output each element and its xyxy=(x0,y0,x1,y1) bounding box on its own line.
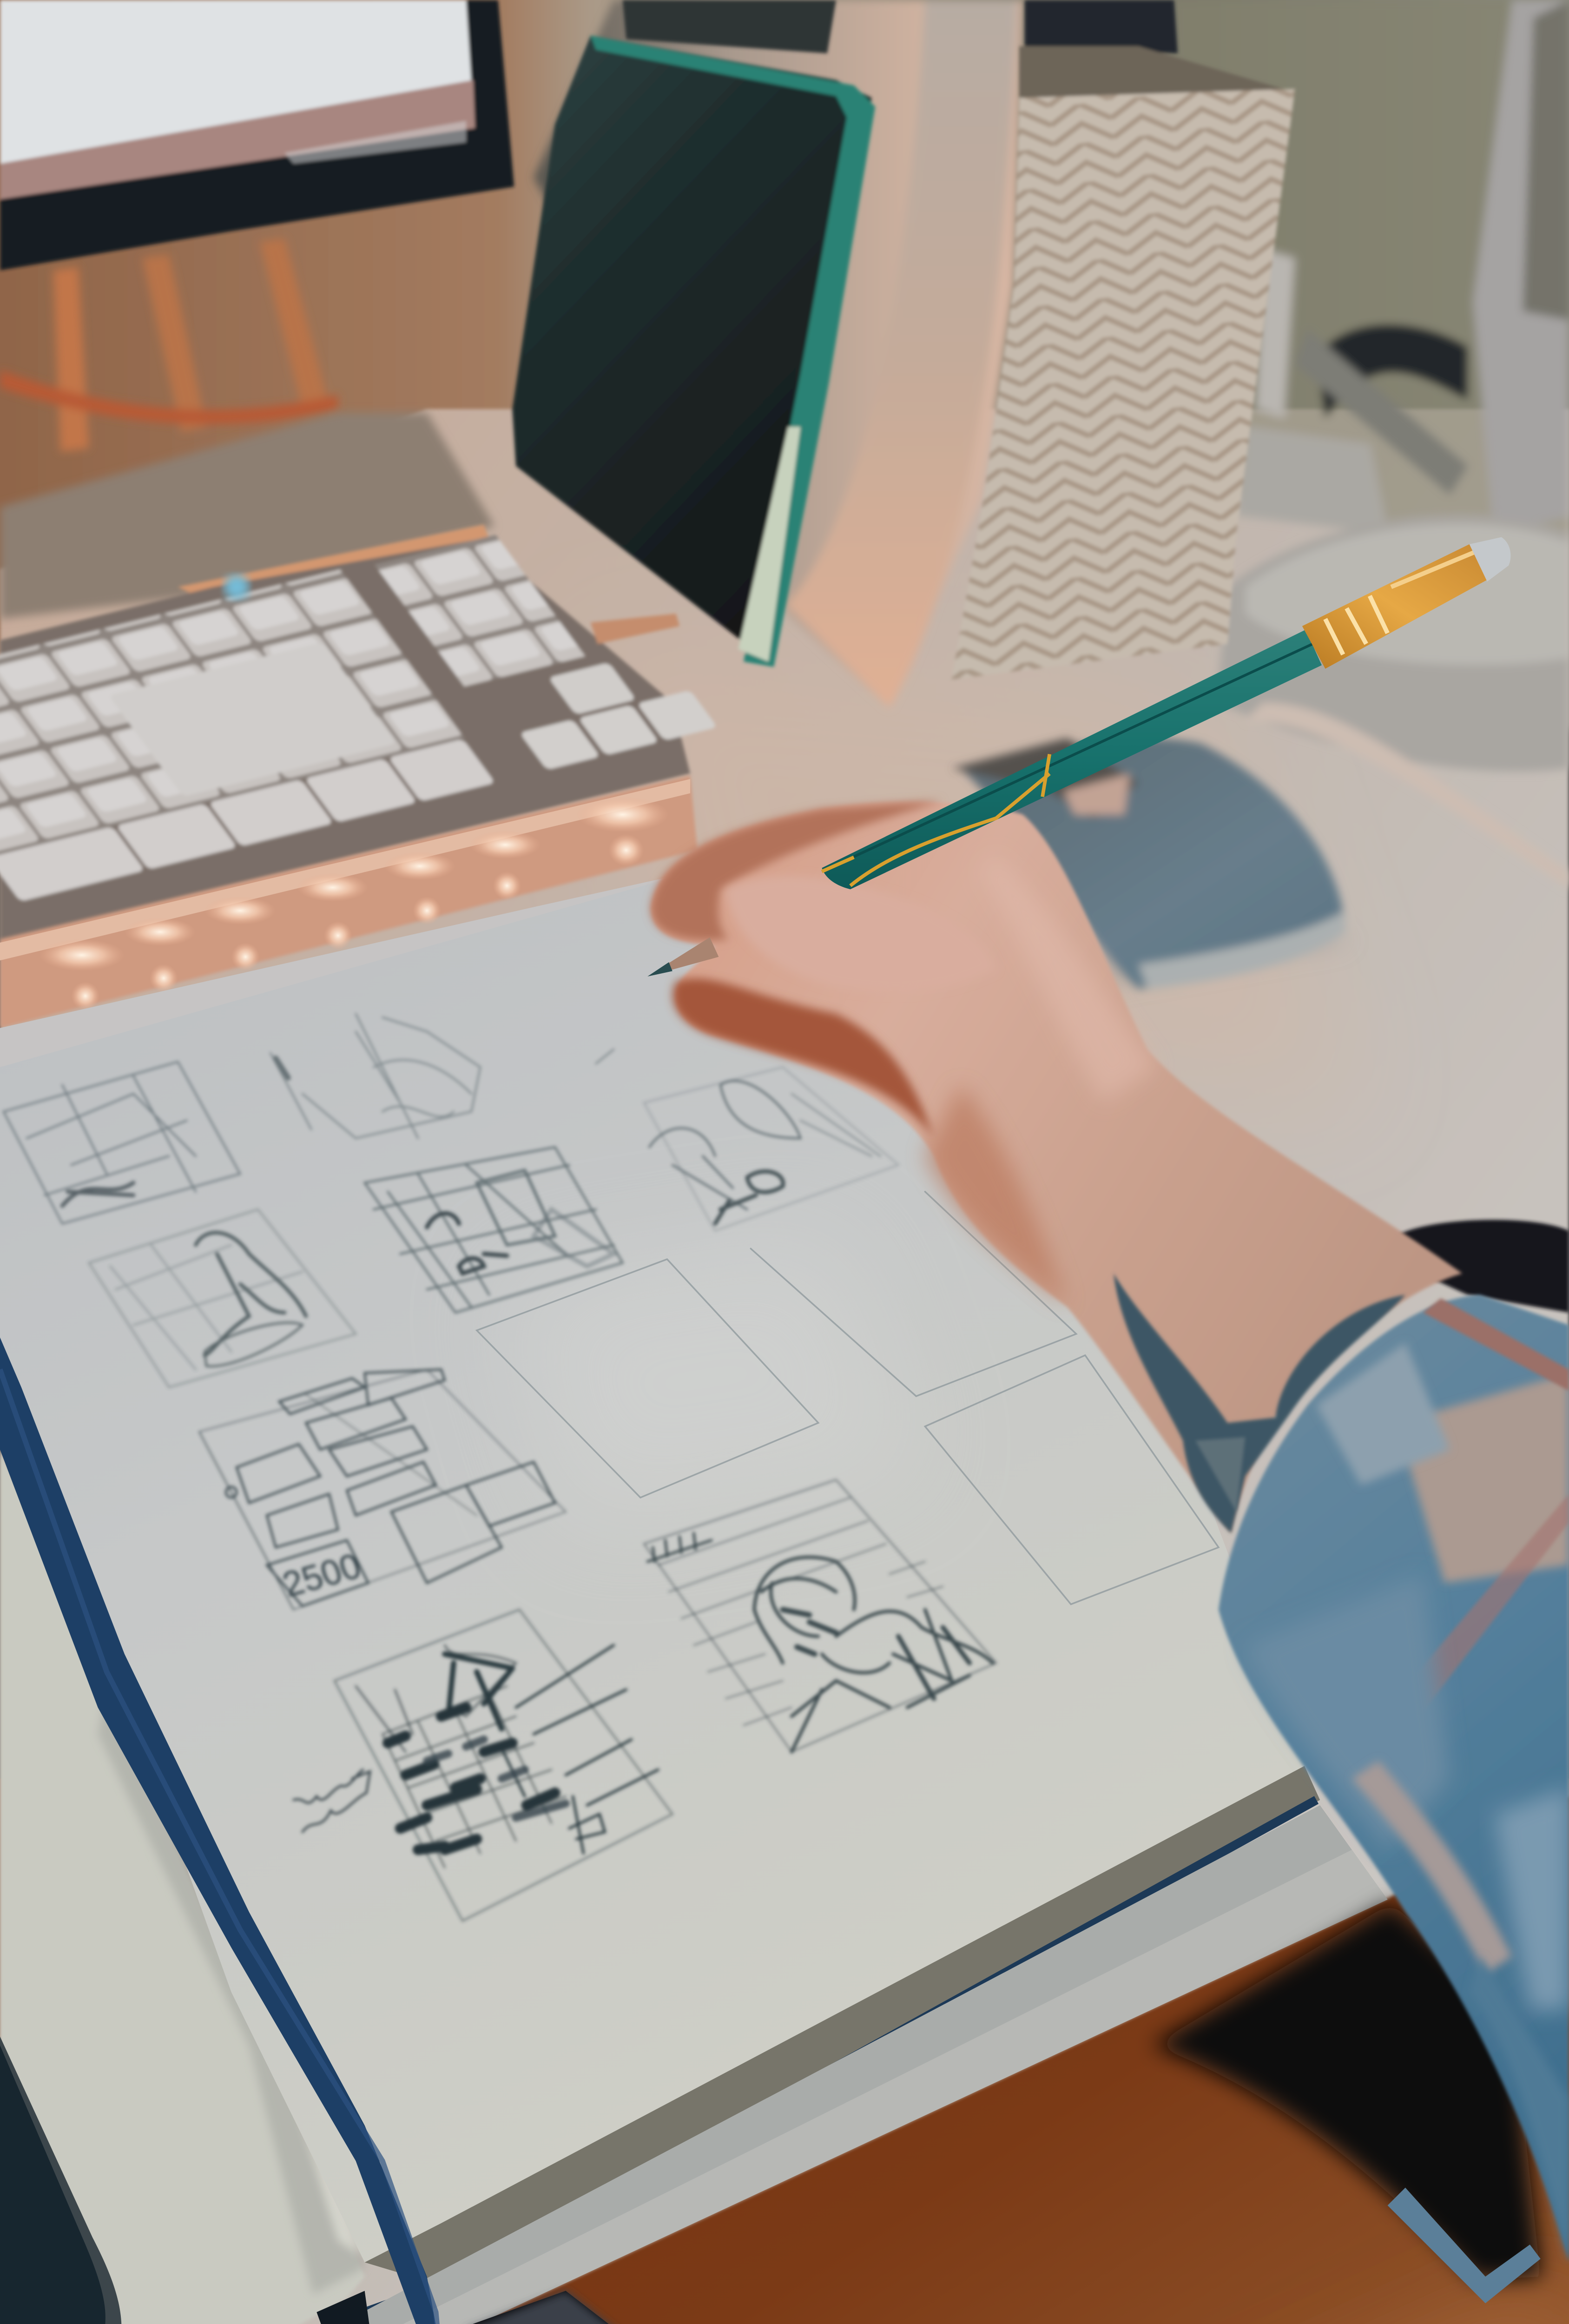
lamp and cables xyxy=(1174,0,1569,889)
sketch: room, top left xyxy=(4,1062,240,1224)
right page xyxy=(0,868,1307,2262)
drawing tablet xyxy=(512,0,875,667)
sketch: phone app ui wireframe xyxy=(199,1369,566,1610)
monitor xyxy=(0,0,514,271)
sketch: checkerboard stairs scene xyxy=(335,1610,672,1921)
sketch: handwritten note xyxy=(294,1769,370,1832)
notebook block xyxy=(0,868,1388,2324)
desk front edge xyxy=(0,1805,1388,2324)
LED light strip xyxy=(0,775,697,1028)
main key block xyxy=(0,569,497,902)
chevron paper box xyxy=(952,0,1295,680)
left page xyxy=(0,1450,365,2324)
ribbon bookmark xyxy=(0,1338,466,2324)
monitor riser xyxy=(0,413,494,619)
empty thumbnail frames xyxy=(477,1192,1219,1604)
pencil tip xyxy=(647,938,719,977)
keyboard xyxy=(0,518,718,943)
sketch: long hair figure xyxy=(89,1209,356,1387)
plaid sleeve xyxy=(1219,1295,1569,2262)
sketch: portrait of girl with headphones xyxy=(644,1480,996,1752)
fingers in shadow xyxy=(651,800,943,940)
lamp base xyxy=(1217,516,1569,772)
gold ferrule xyxy=(1302,544,1487,669)
thumb highlight xyxy=(726,876,996,992)
lens cap behind sleeve xyxy=(1397,1220,1569,1313)
thumbnail sketches xyxy=(4,1014,1219,1921)
blue cover line xyxy=(0,1800,1316,2324)
sketch: interior centre xyxy=(365,1147,623,1313)
navigation key block xyxy=(375,518,718,774)
sketch: top right room xyxy=(644,1067,898,1231)
pencil xyxy=(647,537,1510,977)
black shadow under sleeve xyxy=(1153,1903,1541,2303)
rug and dark floor xyxy=(0,2291,800,2324)
eraser xyxy=(1470,537,1510,581)
paper bag behind tablet xyxy=(534,0,1023,708)
wood floor xyxy=(0,1779,1569,2324)
phone on desk xyxy=(0,2036,121,2324)
background wall xyxy=(0,0,1569,729)
sketch: figure at top xyxy=(270,1014,614,1138)
pencil shaft xyxy=(822,630,1322,889)
sketch label: price: 2500 xyxy=(277,1546,366,1604)
computer mouse xyxy=(952,738,1352,996)
page stack edge xyxy=(365,1761,1320,2285)
forearm and hand xyxy=(651,800,1462,1533)
tattoo xyxy=(1114,1274,1405,1533)
monitor stand and orange cable xyxy=(0,238,338,452)
